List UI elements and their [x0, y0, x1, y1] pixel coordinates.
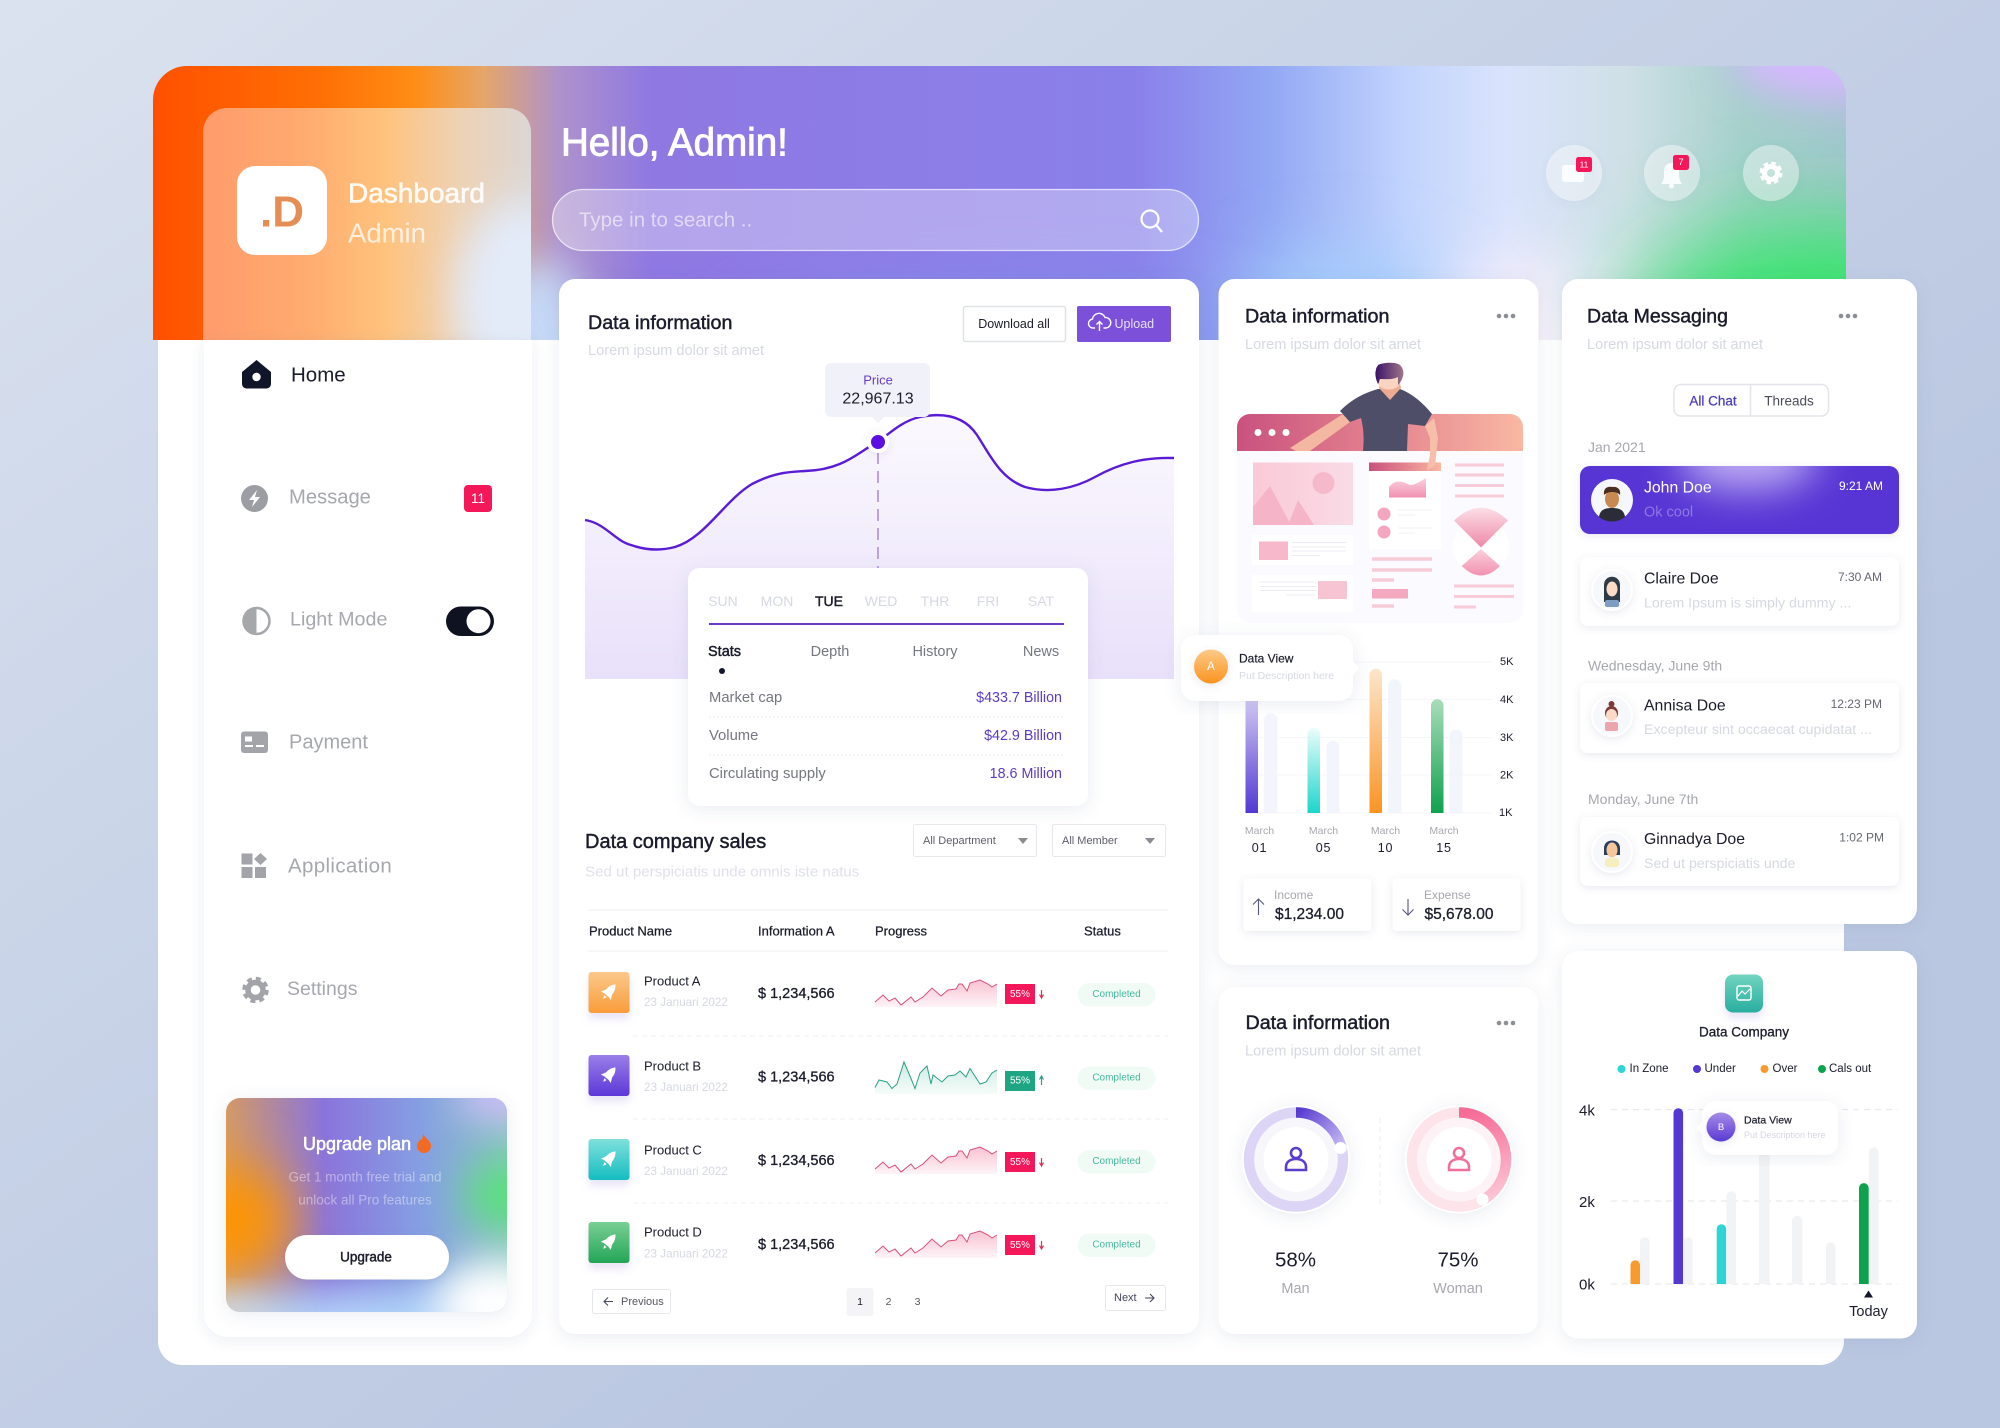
chat: John Doe	[1578, 466, 1900, 538]
upgrade description: unlock all Pro features	[298, 1192, 432, 1208]
stat tabs: News	[1023, 644, 1059, 660]
table header: Status	[1084, 924, 1121, 938]
icon: settings gear	[1743, 145, 1799, 201]
weekday tabs: WED	[865, 593, 897, 609]
row: product C: Product C	[644, 1142, 702, 1158]
weekday tabs: FRI	[977, 593, 999, 609]
axis dates	[1245, 825, 1459, 855]
brand name: Dashboard	[348, 178, 485, 208]
grouped bar chart	[1245, 656, 1514, 855]
row: product D: 55%	[1010, 1240, 1030, 1251]
stats rows: Volume	[709, 728, 758, 744]
sales table	[588, 910, 1168, 1263]
callout: data view B: Data View	[1744, 1114, 1792, 1126]
row: product A: 55%	[1010, 989, 1030, 1000]
chart subtitle: Lorem ipsum dolor sit amet	[588, 343, 764, 359]
date label: Wednesday, June 9th	[1588, 658, 1722, 674]
row: product C	[588, 1139, 1156, 1180]
icon: bell with badge	[1644, 145, 1700, 201]
callout: data view B: B	[1718, 1122, 1724, 1133]
chat: John Doe: 9:21 AM	[1839, 479, 1883, 493]
chat: Ginnadya Doe	[1580, 817, 1899, 886]
card subtitle: Lorem ipsum dolor sit amet	[1245, 337, 1421, 353]
avatar	[1592, 696, 1632, 736]
paired bar chart: 2k	[1579, 1194, 1595, 1211]
icon: mail with badge	[1546, 145, 1602, 201]
today marker	[1849, 1290, 1889, 1320]
pagination: Next	[1114, 1292, 1137, 1304]
label: woman share: Woman	[1433, 1281, 1483, 1297]
legend: In Zone	[1630, 1063, 1668, 1075]
row: product A: Product A	[644, 974, 701, 988]
chat: Ginnadya Doe: 1:02 PM	[1839, 830, 1884, 844]
date label: Jan 2021	[1588, 439, 1646, 455]
panel: data company chart	[1562, 951, 1917, 1338]
grouped bar chart: 3K	[1500, 732, 1514, 744]
paired bar chart: 0k	[1579, 1276, 1595, 1294]
logo tile	[237, 166, 327, 255]
expense box	[1392, 878, 1520, 931]
axis dates: 10	[1378, 841, 1393, 855]
axis dates: March	[1245, 825, 1274, 837]
label: man share: 58%	[1275, 1248, 1316, 1272]
nav item: payment: Payment	[289, 732, 368, 754]
price tooltip	[825, 363, 930, 423]
row: product A: $ 1,234,566	[758, 986, 835, 1002]
row: product B: Completed	[1092, 1072, 1141, 1084]
logo tile: .D	[260, 188, 304, 236]
stat tabs: Stats	[708, 644, 741, 660]
row: product A: Completed	[1092, 989, 1141, 1000]
upgrade description: Get 1 month free trial and	[288, 1170, 442, 1184]
menu dots	[1839, 314, 1857, 318]
nav item: settings: Settings	[287, 978, 358, 1000]
table header	[589, 924, 1121, 938]
axis dates: March	[1429, 825, 1459, 837]
dropdown: department	[914, 824, 1036, 856]
dropdown: member	[1052, 824, 1166, 856]
chat: Ginnadya Doe: Sed ut perspiciatis unde	[1644, 856, 1796, 872]
expense box: Expense	[1424, 888, 1471, 902]
pagination: Previous	[621, 1296, 664, 1308]
icon: mail with badge: 11	[1580, 160, 1589, 170]
illustration: man leaning on website window	[1237, 363, 1523, 623]
donut: man	[1242, 1106, 1350, 1214]
chat tabs: All Chat	[1689, 394, 1737, 408]
button: download all: Download all	[978, 317, 1050, 331]
row: product A: 23 Januari 2022	[644, 996, 728, 1009]
upgrade plan card	[224, 1098, 510, 1318]
table header: Progress	[875, 924, 928, 938]
grouped bar chart: 4K	[1500, 694, 1514, 706]
nav item: message: 11	[471, 491, 485, 506]
panel: data messaging	[1562, 279, 1917, 924]
upgrade description	[288, 1170, 442, 1208]
nav item: message	[241, 485, 492, 512]
income box: Income	[1274, 888, 1314, 902]
icon: search	[1142, 210, 1162, 232]
card subtitle: Lorem ipsum dolor sit amet	[1245, 1044, 1421, 1060]
chat: John Doe: Ok cool	[1644, 504, 1693, 520]
avatar	[1592, 832, 1632, 872]
callout: data view A: A	[1207, 661, 1215, 673]
icon: bell with badge: 7	[1678, 157, 1684, 168]
nav item: home: Home	[291, 364, 346, 386]
stats rows: $42.9 Billion	[984, 728, 1062, 744]
row: product D: 23 Januari 2022	[644, 1248, 728, 1260]
area line chart	[585, 415, 1174, 679]
row: product B: 55%	[1010, 1076, 1030, 1086]
table header: Information A	[758, 924, 835, 938]
weekday tabs: TUE	[815, 593, 843, 609]
callout: data view A	[1181, 635, 1359, 701]
upgrade button	[285, 1235, 449, 1280]
sidebar navigation panel	[202, 351, 534, 1342]
row: product D: Product D	[644, 1224, 702, 1240]
chat: Annisa Doe: Excepteur sint occaecat cupidatat ...	[1644, 722, 1872, 738]
today marker: Today	[1849, 1304, 1889, 1320]
card title: Data Messaging	[1587, 306, 1728, 328]
chat: Claire Doe: 7:30 AM	[1838, 570, 1882, 584]
table header: Product Name	[589, 924, 672, 938]
stat tabs: History	[912, 644, 958, 660]
axis dates: March	[1371, 825, 1400, 837]
upgrade heading: Upgrade plan	[303, 1134, 411, 1154]
pagination	[592, 1286, 1166, 1316]
pagination: 3	[915, 1296, 921, 1308]
nav item: application	[242, 853, 392, 878]
legend: Over	[1772, 1063, 1798, 1075]
chat: Annisa Doe: 12:23 PM	[1831, 697, 1882, 711]
axis dates: March	[1309, 825, 1338, 837]
axis dates: 05	[1316, 841, 1331, 855]
row: product B	[588, 1055, 1156, 1096]
row: product B: Product B	[644, 1058, 701, 1074]
grouped bar chart: 2K	[1500, 770, 1514, 782]
stats rows: 18.6 Million	[990, 766, 1062, 782]
chat: John Doe: John Doe	[1644, 480, 1712, 496]
chart title: Data information	[588, 312, 732, 334]
nav item: light mode: Light Mode	[290, 608, 387, 630]
main white panel	[158, 340, 1844, 1365]
chat: Annisa Doe: Annisa Doe	[1644, 698, 1726, 714]
menu dots	[1497, 1021, 1515, 1025]
card subtitle: Lorem ipsum dolor sit amet	[1587, 337, 1763, 353]
dropdown: department: All Department	[923, 835, 996, 847]
panel: price chart and sales table	[559, 279, 1199, 1334]
stats rows: Circulating supply	[709, 766, 826, 782]
callout: data view B	[1696, 1101, 1838, 1155]
stats rows	[709, 690, 1064, 782]
grouped bar chart: 5K	[1500, 656, 1514, 668]
row: product D	[588, 1222, 1156, 1263]
nav item: home	[242, 360, 346, 388]
chat tabs	[1674, 384, 1828, 416]
sales subtitle: Sed ut perspiciatis unde omnis iste natus	[585, 864, 859, 880]
nav item: message: Message	[289, 486, 371, 508]
weekday tabs: MON	[761, 593, 793, 609]
greeting heading: Hello, Admin!	[561, 122, 788, 164]
weekday tabs: SUN	[708, 593, 738, 609]
label: man share	[1275, 1248, 1316, 1297]
expense box: $5,678.00	[1424, 906, 1494, 923]
button: upload: Upload	[1114, 317, 1154, 331]
icon: chart tile	[1725, 974, 1763, 1012]
card title: Data information	[1245, 306, 1389, 328]
avatar	[1592, 570, 1632, 610]
grouped bar chart: 1K	[1499, 807, 1513, 819]
search bar: Type in to search ..	[579, 208, 752, 232]
label: man share: Man	[1281, 1281, 1310, 1297]
data point marker	[867, 431, 889, 453]
date label: Monday, June 7th	[1588, 791, 1698, 807]
chat: Claire Doe: Lorem Ipsum is simply dummy ...	[1644, 596, 1851, 612]
avatar	[1591, 479, 1633, 522]
sales heading: Data company sales	[585, 831, 766, 853]
donut: woman	[1405, 1106, 1513, 1214]
chat: Ginnadya Doe: Ginnadya Doe	[1644, 831, 1745, 848]
menu dots	[1497, 314, 1515, 318]
chat: Claire Doe: Claire Doe	[1644, 570, 1719, 588]
row: product C: 55%	[1010, 1157, 1030, 1168]
button: upload	[1077, 306, 1171, 342]
weekday tabs	[708, 593, 1064, 625]
stats popup card	[688, 568, 1088, 806]
search bar	[552, 190, 1198, 250]
axis dates: 01	[1252, 841, 1267, 855]
chart title: Data Company	[1699, 1024, 1789, 1040]
chat: Claire Doe	[1580, 557, 1899, 626]
card title: Data information	[1246, 1012, 1390, 1034]
legend: Cals out	[1829, 1063, 1872, 1075]
pagination: 2	[886, 1296, 892, 1308]
upgrade button: Upgrade	[340, 1250, 392, 1264]
row: product D: $ 1,234,566	[758, 1237, 835, 1253]
nav item: payment	[241, 732, 368, 754]
chat tabs: Threads	[1764, 394, 1814, 408]
weekday tabs: SAT	[1028, 593, 1055, 609]
row: product B: 23 Januari 2022	[644, 1081, 728, 1094]
stat tabs	[708, 644, 1059, 674]
legend	[1618, 1063, 1872, 1075]
price tooltip: Price	[863, 372, 893, 388]
row: product A	[588, 972, 1156, 1013]
gradient header banner	[153, 66, 1846, 340]
nav item: settings	[244, 978, 358, 1002]
button: download all	[964, 306, 1066, 342]
dropdown: member: All Member	[1062, 835, 1118, 847]
row: product C: Completed	[1092, 1156, 1141, 1167]
chat: Annisa Doe	[1580, 683, 1899, 753]
callout: data view B: Put Description here	[1744, 1130, 1826, 1140]
callout: data view A: Data View	[1239, 652, 1294, 666]
row: product C: 23 Januari 2022	[644, 1165, 728, 1178]
income box	[1244, 878, 1372, 931]
axis dates: 15	[1436, 841, 1452, 855]
stats rows: Market cap	[709, 690, 782, 706]
nav item: light mode	[244, 606, 494, 636]
row: product C: $ 1,234,566	[758, 1153, 835, 1169]
row: product B: $ 1,234,566	[758, 1070, 835, 1086]
callout: data view A: Put Description here	[1239, 670, 1334, 682]
sidebar logo glass panel	[203, 108, 531, 340]
brand subtitle: Admin	[348, 218, 426, 248]
row: product D: Completed	[1092, 1240, 1141, 1250]
label: woman share	[1433, 1248, 1483, 1297]
price tooltip: 22,967.13	[842, 390, 914, 408]
legend: Under	[1704, 1063, 1736, 1075]
paired bar chart	[1579, 1102, 1898, 1294]
stat tabs: Depth	[811, 644, 849, 660]
pagination: 1	[857, 1296, 863, 1308]
income box: $1,234.00	[1275, 906, 1344, 923]
panel: donut gauges	[1218, 987, 1538, 1334]
stats rows: $433.7 Billion	[976, 690, 1062, 706]
paired bar chart: 4k	[1579, 1102, 1595, 1120]
label: woman share: 75%	[1437, 1248, 1479, 1272]
nav item: application: Application	[288, 854, 392, 878]
weekday tabs: THR	[921, 593, 949, 609]
panel: data information with illustration and bars	[1218, 279, 1538, 965]
